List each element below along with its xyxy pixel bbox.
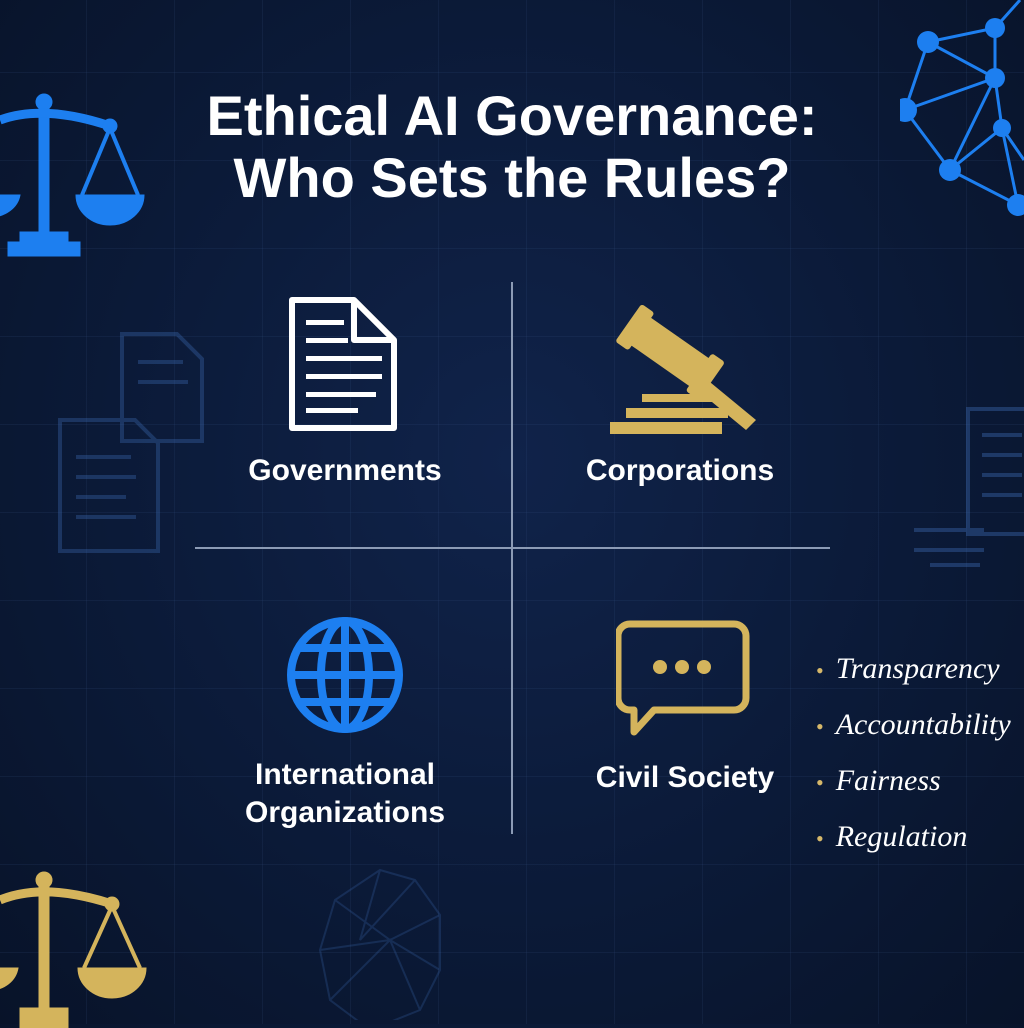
list: principles: • Transparency <box>816 652 1000 685</box>
label: Corporations <box>586 454 774 487</box>
icon: speech bubble <box>616 620 750 736</box>
label: Organizations <box>245 796 445 829</box>
list: principles: • Accountability <box>816 708 1011 741</box>
faded network bottom <box>319 869 441 1020</box>
list: principles <box>816 652 1011 853</box>
label: Civil Society <box>596 761 774 794</box>
list: principles: • Regulation <box>816 820 967 853</box>
icon: gavel <box>610 305 756 434</box>
label <box>245 758 445 829</box>
icon: globe <box>287 617 403 733</box>
title <box>206 84 818 209</box>
panel: corporations <box>586 305 774 487</box>
title: Who Sets the Rules? <box>234 146 790 209</box>
panel: civil society <box>596 620 774 794</box>
label: International <box>255 758 435 791</box>
faded documents left <box>58 332 204 553</box>
panel: governments <box>248 297 442 487</box>
list: principles: • Fairness <box>816 764 941 797</box>
panel: international organizations <box>245 617 445 829</box>
icon: blue scales top-left <box>0 94 144 256</box>
icon: network top-right <box>900 0 1024 216</box>
label: Governments <box>248 454 442 487</box>
icon: document <box>289 297 397 431</box>
divider lines <box>511 282 513 834</box>
title: Ethical AI Governance: <box>206 84 818 147</box>
faded document right <box>914 407 1024 567</box>
icon: gold scales bottom-left <box>0 872 146 1028</box>
